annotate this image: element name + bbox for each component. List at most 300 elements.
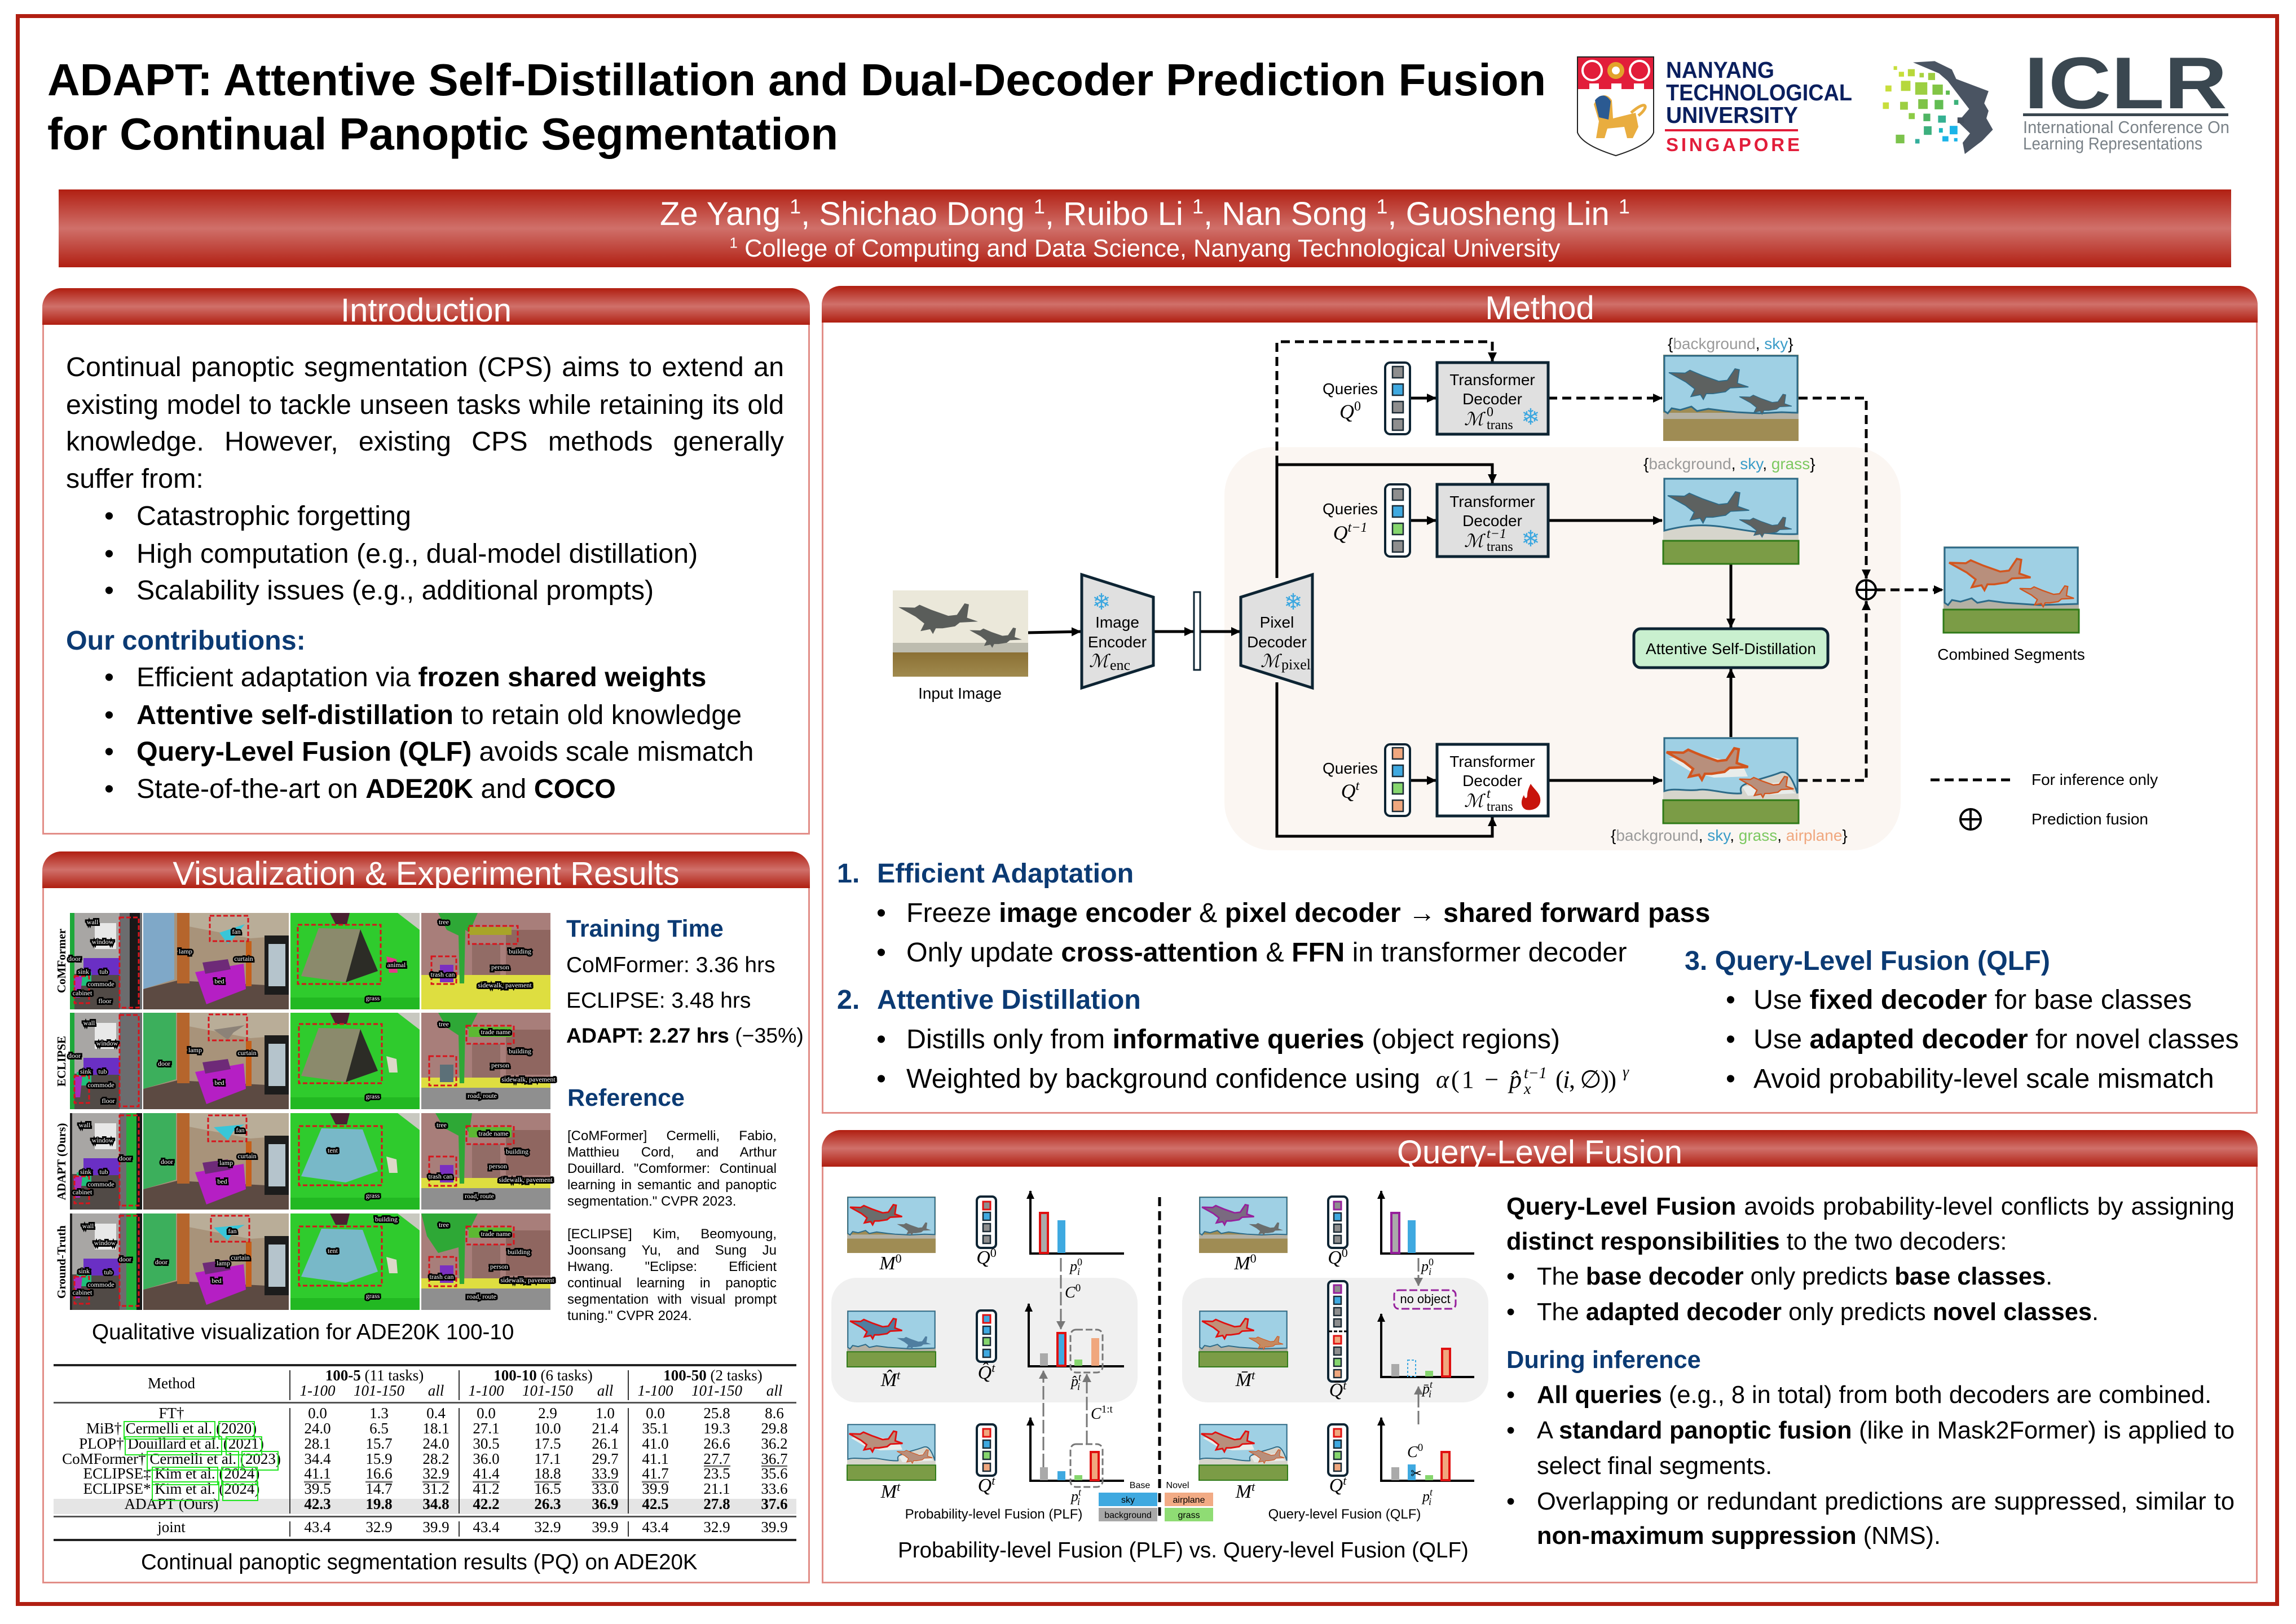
- pixel decoder: pixel: [1281, 656, 1311, 673]
- no object callout: [1394, 1290, 1456, 1309]
- qualitative visualization grid: cabinet: [73, 989, 92, 997]
- results table: 39.5: [304, 1480, 331, 1497]
- reference list: segmentation with visual prompt: [567, 1292, 777, 1307]
- gray highlight regions: [831, 1278, 1488, 1402]
- results table: 37.6: [761, 1495, 788, 1512]
- section 3: query-level fusion: •: [1726, 985, 1735, 1015]
- qualitative visualization grid: trash can: [430, 1273, 453, 1281]
- reference list: segmentation." CVPR 2023.: [567, 1194, 736, 1209]
- results table: MiB† Cermelli et al. (2020): [86, 1420, 257, 1437]
- queries Qt: [1323, 744, 1410, 816]
- PLF row M0: 0: [896, 1251, 902, 1265]
- results table: 100-10 (6 tasks): [493, 1367, 593, 1384]
- authors: Ze Yang 1, Shichao Dong 1, Ruibo Li 1, Nan Song 1, Guosheng Lin 1: [660, 195, 1630, 232]
- qualitative visualization grid: floor: [102, 1097, 115, 1105]
- qualitative visualization grid: sink: [80, 1168, 91, 1176]
- results table: 34.4: [304, 1450, 331, 1467]
- results table: 28.2: [422, 1450, 449, 1467]
- text: query-level fusion explanation: •: [1506, 1417, 1515, 1444]
- results table: 0.0: [308, 1405, 327, 1422]
- transformer decoder t: Transformer: [1449, 753, 1535, 770]
- training time block: ECLIPSE: 3.48 hrs: [566, 988, 751, 1013]
- input image: [893, 590, 1028, 702]
- qualitative visualization grid: tub: [99, 1168, 108, 1176]
- text: introduction body: •: [104, 501, 114, 531]
- results table: 27.8: [703, 1495, 730, 1512]
- PLF row M0: p: [1070, 1258, 1077, 1274]
- reference list: learning in semantic and panoptic: [567, 1177, 777, 1193]
- section 1: efficient adaptation: •: [876, 898, 886, 928]
- qualitative visualization grid: tent: [328, 1146, 338, 1154]
- legend: For inference only: [2031, 771, 2158, 788]
- text: query-level fusion explanation: During inference: [1506, 1347, 1701, 1374]
- no object callout: no object: [1400, 1292, 1451, 1306]
- qualitative visualization grid: sidewalk, pavement: [499, 1176, 553, 1184]
- class color legend: grass: [1178, 1511, 1200, 1520]
- section 3: query-level fusion: Use adapted decoder for novel classes: [1753, 1024, 2239, 1054]
- text: introduction body: •: [104, 539, 114, 569]
- results table: 39.9: [761, 1519, 788, 1535]
- section 2: attentive distillation: Attentive Distillation: [877, 985, 1141, 1015]
- pixel decoder: ℳ: [1261, 651, 1283, 671]
- results table: 24.0: [304, 1420, 331, 1437]
- qualitative visualization grid: grass: [366, 1191, 380, 1199]
- text: introduction body: •: [104, 575, 114, 606]
- results table: 31.2: [422, 1480, 449, 1497]
- results table: 27.7: [703, 1450, 730, 1467]
- QLF row M-bar: i: [1429, 1388, 1431, 1400]
- qualitative visualization grid: animal: [387, 961, 406, 969]
- qualitative visualization grid: door: [68, 955, 81, 963]
- heading: visualization: [42, 851, 810, 888]
- panel: visualization and results: [42, 851, 810, 1583]
- qualitative visualization grid: curtain: [231, 1254, 250, 1261]
- results table: 1-100: [637, 1382, 673, 1399]
- results table: 32.9: [365, 1519, 393, 1535]
- qualitative visualization grid: door: [158, 1060, 170, 1067]
- results table: ECLIPSE‡ Kim et al. (2024): [83, 1465, 259, 1482]
- results table: 24.0: [422, 1435, 449, 1452]
- qualitative visualization grid: door: [119, 1154, 131, 1162]
- QLF column: Query-level Fusion (QLF): [1268, 1507, 1421, 1522]
- qualitative visualization grid: tree: [439, 1221, 449, 1229]
- results table: all: [428, 1382, 444, 1399]
- qualitative visualization grid: sidewalk, pavement: [500, 1276, 554, 1284]
- PLF row Mt: t: [991, 1473, 995, 1488]
- results table: 41.4: [473, 1465, 500, 1482]
- qualitative visualization grid: trade name: [481, 1028, 510, 1036]
- queries Qt: t: [1356, 779, 1360, 793]
- QLF row Mt: Q: [1329, 1475, 1343, 1496]
- reference heading: Reference: [567, 1084, 685, 1111]
- qualitative visualization grid: Ground-Truth: [55, 1225, 68, 1299]
- center divider: [1158, 1197, 1161, 1516]
- qualitative visualization grid: road, route: [468, 1092, 497, 1100]
- transformer decoder t-1: ℳ: [1464, 531, 1486, 551]
- section 2: attentive distillation: α(1 − p̂: [1436, 1066, 1522, 1093]
- text: introduction body: Query-Level Fusion (QLF) avoids scale mismatch: [136, 736, 753, 767]
- text: introduction body: [66, 352, 784, 804]
- logo: ICLR: Learning Representations: [2023, 134, 2202, 153]
- results table: 101-150: [691, 1382, 742, 1399]
- qualitative visualization grid: [55, 913, 556, 1310]
- qualitative visualization grid: tub: [98, 1067, 107, 1075]
- image encoder: ℳ: [1089, 651, 1111, 671]
- results table: 1.0: [596, 1405, 615, 1422]
- results table: 41.1: [642, 1450, 669, 1467]
- pixel decoder: ❄: [1284, 589, 1303, 615]
- image encoder: [1082, 575, 1153, 688]
- panel: query-level fusion: [822, 1130, 2258, 1583]
- QLF row M0: 0: [1429, 1256, 1434, 1268]
- qualitative visualization grid: sink: [80, 1067, 91, 1075]
- logo: NTU: NANYANG: [1666, 57, 1774, 83]
- transformer decoder t: ℳ: [1464, 791, 1486, 811]
- results table: Method: [148, 1375, 195, 1392]
- section 1: efficient adaptation: •: [876, 937, 886, 968]
- qualitative visualization grid: bed: [211, 1277, 222, 1285]
- heading: query-level fusion: Query-Level Fusion: [1397, 1134, 1682, 1171]
- heading: introduction: [42, 288, 810, 325]
- heading: query-level fusion: [822, 1130, 2258, 1167]
- qualitative visualization grid: building: [375, 1215, 398, 1223]
- qualitative visualization grid: building: [506, 1148, 528, 1155]
- transformer decoder t: t: [1487, 787, 1491, 801]
- training time block: CoMFormer: 3.36 hrs: [566, 953, 775, 977]
- transformer decoder t-1: t−1: [1487, 527, 1506, 541]
- transformer decoder t: trans: [1487, 800, 1513, 814]
- qualitative visualization grid: CoMFormer: [55, 929, 68, 993]
- queries Q0: [1323, 363, 1410, 434]
- results table: 41.2: [473, 1480, 500, 1497]
- results table: 0.0: [646, 1405, 665, 1422]
- results table: 26.1: [592, 1435, 619, 1452]
- results table: 41.0: [642, 1435, 669, 1452]
- results table: 28.1: [304, 1435, 331, 1452]
- PLF row Mt: [847, 1418, 1124, 1507]
- qualitative visualization grid: commode: [87, 1281, 114, 1288]
- logo: NTU: TECHNOLOGICAL: [1666, 80, 1852, 105]
- qualitative visualization grid: trash can: [431, 970, 455, 978]
- transformer decoder 0: ℳ: [1464, 409, 1486, 429]
- PLF row M-hat: i: [1077, 1381, 1080, 1392]
- qualitative visualization grid: person: [491, 963, 509, 971]
- results table: 10.0: [534, 1420, 561, 1437]
- text: query-level fusion explanation: The base decoder only predicts base classes.: [1537, 1263, 2052, 1290]
- segmentation output t-1: [1643, 455, 1815, 564]
- results table: CoMFormer† Cermelli et al. (2023): [62, 1450, 281, 1467]
- results table: 32.9: [422, 1465, 449, 1482]
- text: query-level fusion explanation: non-maximum suppression (NMS).: [1537, 1522, 1941, 1550]
- qualitative visualization grid: wall: [79, 1121, 91, 1129]
- text: query-level fusion explanation: [1506, 1193, 2235, 1550]
- panel: introduction: [42, 288, 810, 835]
- PLF row M0: 0: [1077, 1256, 1082, 1268]
- qualitative visualization grid: door: [68, 1052, 81, 1060]
- QLF row Mt: [1199, 1418, 1474, 1507]
- training time block: Training Time: [566, 915, 724, 942]
- reference list: continual learning in panoptic: [567, 1276, 777, 1291]
- qualitative visualization grid: fan: [236, 1126, 245, 1134]
- results table: 16.5: [534, 1480, 561, 1497]
- section 3: query-level fusion: [1685, 946, 2239, 1094]
- results table: 36.9: [592, 1495, 619, 1512]
- training time block: [566, 915, 804, 1047]
- section 2: attentive distillation: •: [876, 1063, 886, 1094]
- qualitative visualization grid: commode: [87, 1180, 114, 1188]
- text: introduction body: existing model to tackle unseen tasks while retaining its old: [66, 390, 784, 420]
- results table: 35.1: [642, 1420, 669, 1437]
- segmentation output 0: [1663, 335, 1799, 441]
- section 3: query-level fusion: •: [1726, 1063, 1735, 1094]
- PLF column: [847, 1191, 1124, 1522]
- title: ADAPT: Attentive Self-Distillation and Dual-Decoder Prediction Fusion: [47, 55, 1546, 105]
- qualitative visualization grid: trade name: [481, 1230, 510, 1238]
- image encoder: Encoder: [1088, 633, 1147, 651]
- results table: 101-150: [522, 1382, 573, 1399]
- results table: 43.4: [642, 1519, 669, 1535]
- results table: 27.1: [473, 1420, 500, 1437]
- section 2: attentive distillation: [837, 985, 1629, 1098]
- qualitative visualization grid: road, route: [465, 1192, 494, 1200]
- PLF row M-hat: M̂: [881, 1370, 897, 1391]
- queries Qt-1: [1323, 484, 1410, 557]
- text: introduction body: High computation (e.g., dual-model distillation): [136, 539, 698, 569]
- QLF row M0: [1199, 1191, 1474, 1277]
- QLF row M-bar: t: [1251, 1368, 1255, 1382]
- QLF row M0: M: [1234, 1253, 1250, 1274]
- results table: 1-100: [300, 1382, 336, 1399]
- qualitative visualization grid: commode: [87, 1081, 114, 1089]
- PLF row M0: 0: [990, 1246, 997, 1260]
- PLF row M0: Q: [976, 1247, 990, 1268]
- PLF column: Probability-level Fusion (PLF): [905, 1507, 1082, 1522]
- segmentation output t: [1611, 737, 1848, 844]
- qualitative visualization grid: curtain: [234, 955, 253, 963]
- text: introduction body: Catastrophic forgetting: [136, 501, 411, 531]
- section 2: attentive distillation: •: [876, 1024, 886, 1054]
- results table: 101-150: [354, 1382, 404, 1399]
- section 1: efficient adaptation: Only update cross-attention & FFN in transformer decoder: [906, 937, 1627, 968]
- PLF row M-hat: [847, 1304, 1124, 1392]
- results table: 14.7: [365, 1480, 393, 1497]
- results table: 15.9: [365, 1450, 393, 1467]
- queries Q0: 0: [1354, 399, 1361, 414]
- PLF row Mt: i: [1077, 1496, 1080, 1507]
- reference list: [CoMFormer] Cermelli, Fabio,: [567, 1128, 777, 1144]
- section 1: efficient adaptation: Freeze image encoder & pixel decoder → shared forward pass: [906, 898, 1710, 928]
- qualitative visualization grid: wall: [82, 1222, 94, 1230]
- text: introduction body: knowledge. However, existing CPS methods generally: [66, 426, 784, 457]
- results table: 16.6: [365, 1465, 393, 1482]
- transformer decoder t-1: [1437, 484, 1548, 557]
- text: query-level fusion explanation: •: [1506, 1299, 1515, 1326]
- caption: PLF vs QLF: Probability-level Fusion (PLF) vs. Query-level Fusion (QLF): [898, 1538, 1469, 1563]
- section 2: attentive distillation: Distills only from informative queries (object regions): [906, 1024, 1560, 1054]
- transformer decoder t: Decoder: [1462, 772, 1522, 789]
- results table: 39.9: [592, 1519, 619, 1535]
- qualitative visualization grid: trade name: [479, 1129, 508, 1137]
- text: introduction body: •: [104, 662, 114, 692]
- results table: [54, 1364, 796, 1541]
- attentive self-distillation: [1634, 629, 1828, 668]
- attentive self-distillation: Attentive Self-Distillation: [1646, 640, 1816, 657]
- class color legend: airplane: [1173, 1495, 1205, 1505]
- QLF row Mt: t: [1430, 1486, 1433, 1498]
- qualitative visualization grid: building: [509, 947, 531, 955]
- QLF row M0: p: [1421, 1258, 1429, 1274]
- results table: 35.6: [761, 1465, 788, 1482]
- text: query-level fusion explanation: The adapted decoder only predicts novel classes.: [1537, 1299, 2099, 1326]
- text: query-level fusion explanation: All queries (e.g., 8 in total) from both decoders are combined.: [1537, 1382, 2211, 1409]
- text: query-level fusion explanation: distinct responsibilities to the two decoders:: [1506, 1228, 2007, 1255]
- section 1: efficient adaptation: Efficient Adaptation: [877, 858, 1134, 889]
- QLF row M-bar: t: [1343, 1378, 1347, 1392]
- transformer decoder t-1: Decoder: [1462, 512, 1522, 529]
- qualitative visualization grid: cabinet: [73, 1188, 92, 1196]
- qualitative visualization grid: commode: [87, 980, 114, 988]
- qualitative visualization grid: ECLIPSE: [55, 1036, 68, 1087]
- logo: ICLR: [1883, 42, 2229, 155]
- QLF row Mt: M: [1236, 1481, 1251, 1502]
- results table: joint: [157, 1519, 186, 1535]
- reference list: Joonsang Yu, and Sung Ju: [567, 1243, 777, 1258]
- results table: all: [597, 1382, 613, 1399]
- section 2: attentive distillation: γ: [1623, 1063, 1629, 1081]
- text: query-level fusion explanation: Query-Level Fusion avoids probability-level conflicts by assigning: [1506, 1193, 2235, 1220]
- transformer decoder 0: ❄: [1521, 404, 1540, 430]
- qualitative visualization grid: fan: [232, 928, 241, 935]
- text: introduction body: •: [104, 774, 114, 804]
- qualitative visualization grid: lamp: [179, 947, 192, 955]
- qualitative visualization grid: person: [491, 1061, 509, 1069]
- heading: method: Method: [1485, 290, 1594, 326]
- fusion symbol: [1857, 580, 1876, 599]
- qualitative visualization grid: curtain: [237, 1152, 257, 1160]
- qualitative visualization grid: grass: [366, 994, 380, 1002]
- PLF row Mt: t: [1078, 1486, 1082, 1498]
- text: introduction body: State-of-the-art on ADE20K and COCO: [136, 774, 616, 804]
- results table: 6.5: [369, 1420, 389, 1437]
- PLF row Mt: M: [881, 1481, 897, 1502]
- logo: ICLR: ICLR: [2024, 42, 2227, 124]
- transformer decoder t-1: ❄: [1521, 526, 1540, 552]
- logo: NTU: UNIVERSITY: [1666, 102, 1798, 128]
- qualitative visualization grid: door: [161, 1158, 173, 1166]
- queries Qt: Q: [1341, 780, 1356, 802]
- results table: 43.4: [304, 1519, 331, 1535]
- results table: 1.3: [369, 1405, 389, 1422]
- section 1: efficient adaptation: 1.: [837, 858, 860, 889]
- qualitative visualization grid: road, route: [467, 1292, 496, 1300]
- results table: 32.9: [534, 1519, 561, 1535]
- section 2: attentive distillation: (i, ∅)): [1555, 1066, 1616, 1093]
- results table: 42.5: [642, 1495, 669, 1512]
- qualitative visualization grid: tent: [328, 1247, 338, 1255]
- QLF row Mt: C: [1407, 1444, 1418, 1461]
- queries Q0: Queries: [1323, 380, 1378, 398]
- qualitative visualization grid: bed: [214, 1079, 224, 1087]
- legend: [1931, 771, 2158, 829]
- results table: 26.3: [534, 1495, 561, 1512]
- QLF row M0: Q: [1328, 1247, 1342, 1268]
- queries Qt-1: t−1: [1348, 520, 1367, 535]
- QLF row M-bar: Q̄: [1329, 1380, 1343, 1401]
- PLF row M-hat: p̂: [1071, 1373, 1078, 1389]
- results table: all: [766, 1382, 782, 1399]
- text: introduction body: Efficient adaptation via frozen shared weights: [136, 662, 706, 692]
- qualitative visualization grid: door: [155, 1258, 168, 1266]
- qualitative visualization grid: window: [92, 1136, 114, 1144]
- text: query-level fusion explanation: •: [1506, 1263, 1515, 1290]
- results table: 39.9: [422, 1519, 449, 1535]
- text: query-level fusion explanation: •: [1506, 1488, 1515, 1515]
- results table: 21.4: [592, 1420, 619, 1437]
- class color legend: sky: [1121, 1495, 1135, 1505]
- qualitative visualization grid: wall: [87, 918, 99, 926]
- input image: Input Image: [918, 685, 1002, 702]
- title: [47, 55, 1546, 159]
- results table: 42.2: [473, 1495, 500, 1512]
- qualitative visualization grid: grass: [366, 1292, 380, 1300]
- results table: 36.2: [761, 1435, 788, 1452]
- results table: 29.8: [761, 1420, 788, 1437]
- logo: NTU: SINGAPORE: [1666, 134, 1800, 155]
- QLF row Mt: 0: [1418, 1442, 1423, 1454]
- results table: 29.7: [592, 1450, 619, 1467]
- transformer decoder 0: [1437, 363, 1548, 434]
- results table: 26.6: [703, 1435, 730, 1452]
- author banner: [59, 189, 2231, 267]
- results table: 34.8: [422, 1495, 449, 1512]
- legend: Prediction fusion: [2031, 810, 2148, 828]
- qualitative visualization grid: building: [508, 1248, 530, 1256]
- pixel decoder: [1241, 575, 1312, 688]
- qualitative visualization grid: door: [119, 1255, 131, 1263]
- qualitative visualization grid: window: [92, 938, 114, 946]
- qualitative visualization grid: ADAPT (Ours): [55, 1123, 68, 1200]
- QLF row M-bar: t: [1430, 1379, 1433, 1390]
- transformer decoder 0: Decoder: [1462, 390, 1522, 408]
- caption: qualitative visualization: Qualitative visualization for ADE20K 100-10: [92, 1320, 514, 1344]
- text: introduction body: Attentive self-distillation to retain old knowledge: [136, 700, 742, 730]
- results table: 33.0: [592, 1480, 619, 1497]
- transformer decoder t-1: Transformer: [1449, 493, 1535, 510]
- training time block: ADAPT: 2.27 hrs (−35%): [566, 1023, 804, 1047]
- results table: 43.4: [473, 1519, 500, 1535]
- panel: method: [822, 286, 2258, 1114]
- class color legend: Base: [1130, 1481, 1150, 1490]
- reference list: Douillard. "Comformer: Continual: [567, 1161, 777, 1176]
- qualitative visualization grid: trash can: [429, 1172, 452, 1180]
- text: introduction body: Continual panoptic segmentation (CPS) aims to extend an: [66, 352, 784, 382]
- qualitative visualization grid: tub: [99, 968, 108, 976]
- reference list: tuning." CVPR 2024.: [567, 1308, 692, 1323]
- qualitative visualization grid: sink: [78, 1267, 90, 1275]
- PLF column: 1:t: [1101, 1404, 1113, 1415]
- PLF row M0: i: [1077, 1266, 1080, 1277]
- QLF column: [1199, 1191, 1474, 1522]
- queries Qt-1: Q: [1333, 522, 1348, 544]
- title: for Continual Panoptic Segmentation: [47, 109, 838, 159]
- qualitative visualization grid: bed: [217, 1177, 227, 1185]
- image encoder: Image: [1095, 614, 1139, 631]
- results table: 41.1: [304, 1465, 331, 1482]
- results table: 2.9: [538, 1405, 557, 1422]
- QLF row Mt: ✂: [1411, 1466, 1422, 1481]
- results table: 30.5: [473, 1435, 500, 1452]
- qualitative visualization grid: lamp: [219, 1159, 233, 1167]
